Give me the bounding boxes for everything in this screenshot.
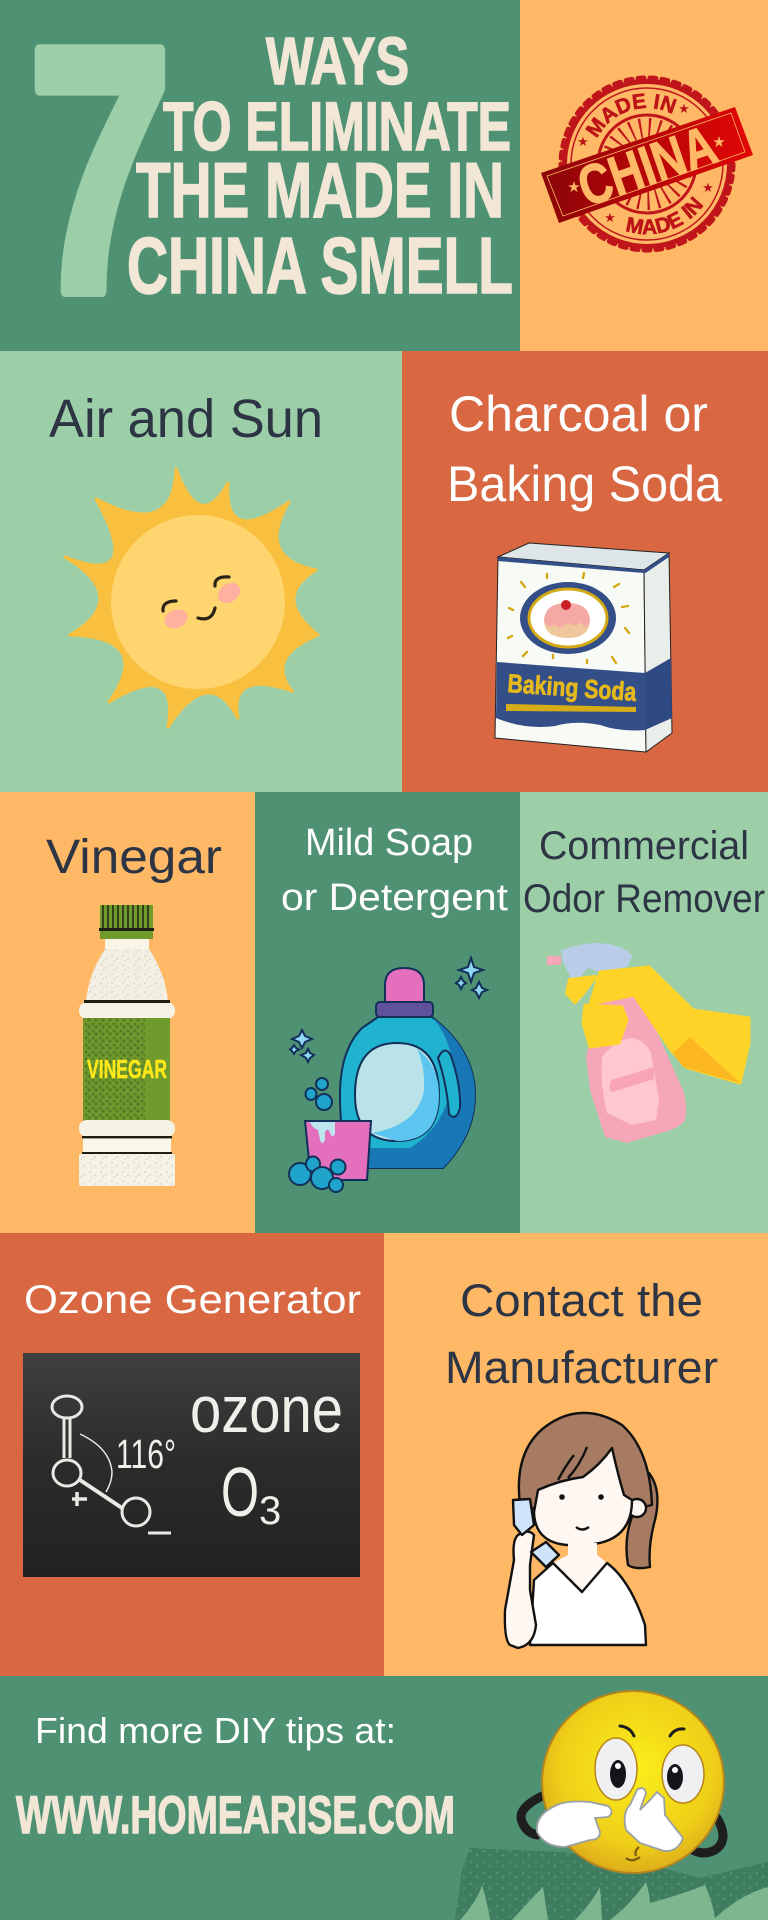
heading: contact the manufacturer: Contact the: [460, 1275, 703, 1326]
panel: vinegar: [0, 792, 255, 1233]
icon: detergent bottle and bucket: [289, 958, 487, 1192]
icon: made in china stamp: MADE IN: [626, 196, 704, 234]
icon: made in china stamp: ★: [604, 210, 616, 225]
title: [127, 24, 513, 310]
icon: emoji holding nose: [521, 1691, 724, 1873]
panel: commercial odor remover: [520, 792, 768, 1233]
icon: made in china stamp: [541, 76, 753, 252]
icon: baking soda box: Baking Soda: [507, 668, 638, 707]
image: chalkboard with ozone molecule: 116°: [116, 1431, 176, 1477]
image: chalkboard with ozone molecule: [23, 1353, 360, 1577]
icon: made in china stamp: ★: [577, 134, 589, 149]
heading: mild soap or detergent: Mild Soap: [305, 822, 473, 864]
icon: woman on the phone: [505, 1413, 657, 1648]
heading: commercial odor remover: [523, 824, 765, 921]
icon: made in china stamp: ★: [567, 179, 581, 196]
title: TO ELIMINATE: [163, 88, 511, 165]
icon: made in china stamp: ★: [712, 134, 726, 151]
icon: baking soda box: [495, 543, 672, 752]
text: find more diy tips: Find more DIY tips at:: [35, 1710, 396, 1751]
panel: ozone generator: [0, 1233, 384, 1676]
image: chalkboard with ozone molecule: ozone: [190, 1372, 343, 1446]
icon: made in china stamp: CHINA: [570, 113, 725, 218]
heading: ozone generator: Ozone Generator: [24, 1278, 361, 1322]
title: WAYS: [266, 24, 409, 99]
panel: air and sun: [0, 351, 402, 792]
heading: charcoal or baking soda: Charcoal or: [449, 386, 708, 442]
icon: made in china stamp: ★: [702, 180, 714, 195]
icon: vinegar bottle: VINEGAR: [87, 1054, 167, 1084]
panel: mild soap or detergent: [255, 792, 520, 1233]
text: website url: WWW.HOMEARISE.COM: [16, 1786, 455, 1845]
panel: header: [0, 0, 520, 366]
icon: gloved hand with spray bottle: [547, 943, 749, 1143]
heading: contact the manufacturer: [445, 1275, 718, 1393]
grass decoration: [455, 1848, 768, 1920]
heading: commercial odor remover: Commercial: [539, 824, 749, 868]
title: CHINA SMELL: [127, 221, 513, 310]
heading: mild soap or detergent: [281, 822, 508, 919]
icon: made in china stamp: MADE IN: [585, 93, 677, 138]
heading: vinegar: Vinegar: [46, 831, 222, 884]
heading: mild soap or detergent: or Detergent: [281, 877, 508, 919]
title: THE MADE IN: [136, 146, 504, 234]
panel: footer: [0, 1676, 768, 1920]
heading: air and sun: Air and Sun: [49, 389, 323, 449]
heading: contact the manufacturer: Manufacturer: [445, 1342, 718, 1393]
heading: charcoal or baking soda: [447, 386, 722, 512]
image: chalkboard with ozone molecule: O: [221, 1453, 259, 1531]
panel: contact the manufacturer: [384, 1233, 768, 1676]
panel: charcoal or baking soda: [402, 351, 768, 792]
icon: made in china stamp: ★: [678, 101, 690, 116]
heading: charcoal or baking soda: Baking Soda: [447, 456, 722, 512]
panel: stamp: [520, 0, 768, 351]
icon: vinegar bottle: [79, 905, 175, 1186]
icon: smiling sun: [65, 469, 318, 727]
image: chalkboard with ozone molecule: 3: [259, 1489, 281, 1533]
